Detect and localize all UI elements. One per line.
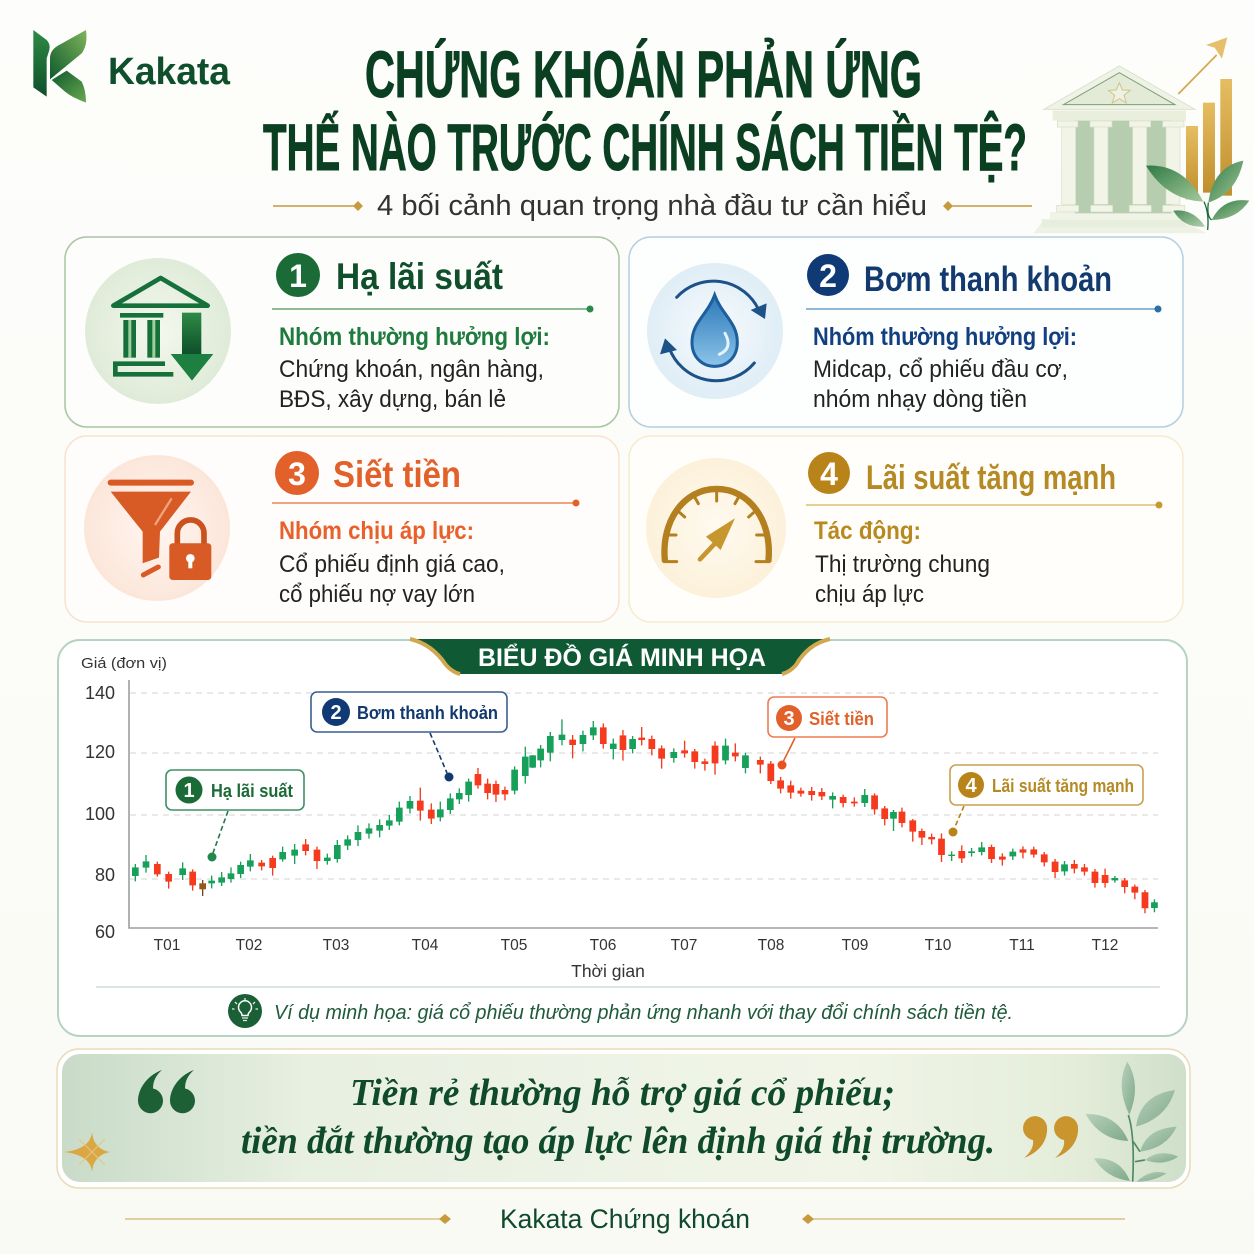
- axes and gridlines: 80: [95, 865, 115, 885]
- footer: Kakata Chứng khoán: [500, 1204, 750, 1234]
- text block: [814, 517, 990, 608]
- heading: 1: [289, 258, 307, 294]
- chart heading ribbon: BIỂU ĐỒ GIÁ MINH HỌA: [478, 642, 766, 672]
- chart heading ribbon: [410, 639, 830, 674]
- quote text: tiền đắt thường tạo áp lực lên định giá thị trường.: [241, 1120, 995, 1162]
- axes and gridlines: T06: [590, 937, 616, 954]
- text block: cổ phiếu nợ vay lớn: [279, 581, 475, 608]
- panel: card 3 Siết tiền: [65, 436, 619, 622]
- callout: Siết tiền: Siết tiền: [809, 708, 874, 729]
- text block: Tác động:: [814, 517, 921, 545]
- axes and gridlines: Giá (đơn vị): [81, 655, 167, 672]
- heading: 2: [819, 258, 837, 294]
- title: CHỨNG KHOÁN PHẢN ỨNG: [365, 37, 922, 111]
- axes and gridlines: T11: [1009, 937, 1035, 954]
- callout: Hạ lãi suất: Hạ lãi suất: [211, 780, 293, 801]
- footer: [125, 1204, 1125, 1234]
- heading: 3: [288, 456, 306, 492]
- heading: [807, 254, 1112, 299]
- axes and gridlines: Thời gian: [571, 961, 645, 981]
- heading: Lãi suất tăng mạnh: [866, 459, 1116, 497]
- axes and gridlines: T03: [323, 937, 349, 954]
- heading: Bơm thanh khoản: [864, 260, 1112, 299]
- icon: plant: [1086, 1062, 1178, 1182]
- axes and gridlines: T05: [501, 937, 527, 954]
- text block: Midcap, cổ phiếu đầu cơ,: [813, 356, 1068, 383]
- icon: water drop with cycle arrows: [647, 263, 783, 399]
- candlesticks part 2: [642, 727, 1154, 913]
- panel: price chart: [58, 639, 1187, 1036]
- subtitle: 4 bối cảnh quan trọng nhà đầu tư cần hiểu: [377, 190, 927, 222]
- callout: Bơm thanh khoản: [311, 692, 507, 782]
- axes and gridlines: [81, 655, 1158, 981]
- text block: Thị trường chung: [815, 551, 990, 578]
- axes and gridlines: T09: [842, 937, 868, 954]
- title: [263, 37, 1027, 184]
- icon: light bulb: [228, 994, 262, 1028]
- text block: Nhóm thường hưởng lợi:: [813, 323, 1077, 351]
- callout: Hạ lãi suất: 1: [183, 780, 195, 802]
- icon: opening quote mark: [138, 1070, 195, 1113]
- axes and gridlines: 140: [85, 683, 115, 703]
- text block: [279, 517, 505, 608]
- panel: card 1 Hạ lãi suất: [65, 237, 619, 427]
- candlesticks part 1: [135, 719, 633, 896]
- axes and gridlines: T01: [154, 937, 180, 954]
- panel: card 2 Bơm thanh khoản: [629, 237, 1183, 427]
- icon: gauge: [646, 458, 786, 598]
- text block: chịu áp lực: [815, 581, 924, 608]
- axes and gridlines: T10: [925, 937, 952, 954]
- text block: Chứng khoán, ngân hàng,: [279, 356, 544, 383]
- axes and gridlines: T07: [671, 937, 697, 954]
- text block: Nhóm thường hưởng lợi:: [279, 323, 550, 351]
- axes and gridlines: T04: [412, 937, 439, 954]
- icon: closing quote mark: [1023, 1116, 1078, 1158]
- quote text: [241, 1072, 995, 1162]
- icon: funnel with lock: [84, 455, 230, 601]
- icon: bank with down arrow: [85, 258, 231, 404]
- callout: Bơm thanh khoản: Bơm thanh khoản: [357, 702, 498, 723]
- text block: nhóm nhạy dòng tiền: [813, 386, 1027, 413]
- heading: 4: [820, 456, 838, 492]
- panel: quote: [57, 1049, 1190, 1188]
- axes and gridlines: T08: [758, 937, 784, 954]
- heading: Siết tiền: [333, 454, 461, 495]
- axes and gridlines: T02: [236, 937, 262, 954]
- callout: Lãi suất tăng mạnh: Lãi suất tăng mạnh: [992, 775, 1134, 796]
- heading: [276, 253, 503, 297]
- axes and gridlines: 60: [95, 922, 115, 942]
- callout: Hạ lãi suất: [166, 770, 304, 862]
- illustration: bank with gold bars and leaves: [1033, 37, 1249, 233]
- axes and gridlines: 120: [85, 742, 115, 762]
- text block: [279, 323, 550, 413]
- callout: Siết tiền: 3: [783, 708, 795, 730]
- callout: Lãi suất tăng mạnh: 4: [965, 775, 977, 797]
- heading: [808, 452, 1116, 497]
- panel: card 4 Lãi suất tăng mạnh: [629, 436, 1183, 622]
- heading: Hạ lãi suất: [336, 256, 503, 297]
- heading: [275, 451, 461, 495]
- axes and gridlines: 100: [85, 804, 115, 824]
- text block: Nhóm chịu áp lực:: [279, 517, 474, 545]
- text block: BĐS, xây dựng, bán lẻ: [279, 386, 506, 413]
- logo: Kakata: [33, 30, 231, 103]
- text block: Cổ phiếu định giá cao,: [279, 551, 505, 578]
- text block: [813, 323, 1077, 413]
- axes and gridlines: T12: [1092, 937, 1118, 954]
- callout: Siết tiền: [768, 697, 887, 770]
- note text: Ví dụ minh họa: giá cổ phiếu thường phản ứng nhanh với thay đổi chính sách tiền tệ.: [274, 1002, 1013, 1024]
- quote text: Tiền rẻ thường hỗ trợ giá cổ phiếu;: [350, 1072, 895, 1114]
- callout: Bơm thanh khoản: 2: [330, 702, 342, 724]
- callout: Lãi suất tăng mạnh: [948, 765, 1143, 836]
- icon: gold sparkle: [64, 1132, 110, 1172]
- logo: Kakata: Kakata: [108, 51, 231, 93]
